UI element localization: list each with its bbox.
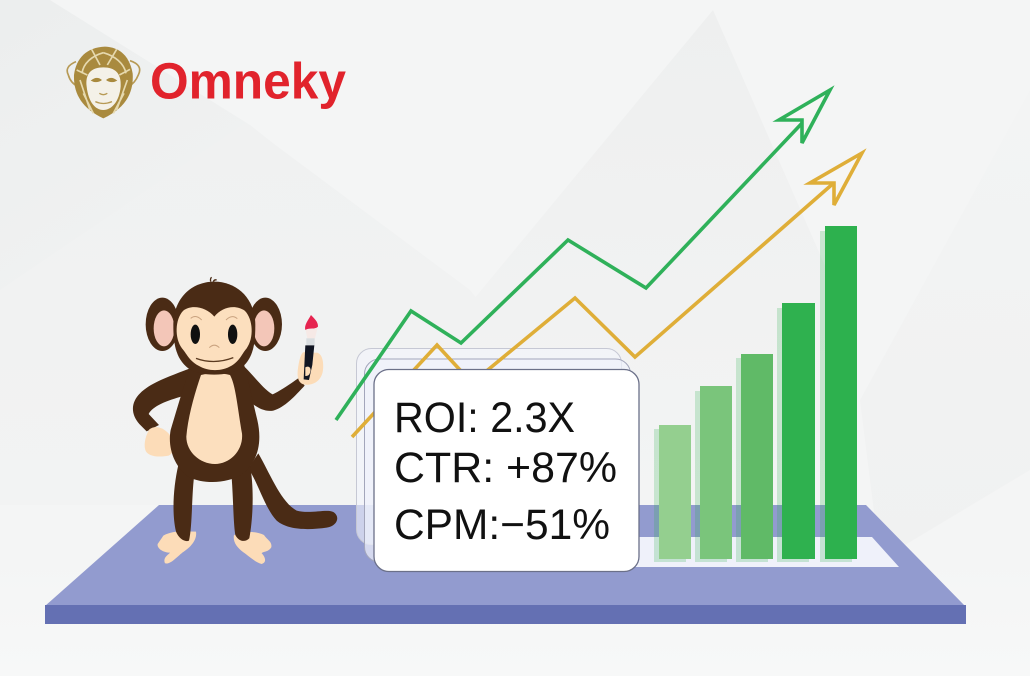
- belly: [186, 373, 242, 464]
- right foot: [234, 532, 271, 564]
- platform front side: [45, 605, 966, 624]
- brows and nose: [191, 317, 237, 348]
- smile: [196, 358, 233, 361]
- eye left: [191, 325, 200, 344]
- paintbrush: [298, 315, 323, 385]
- bar chart: [654, 226, 857, 562]
- back card 2: [364, 359, 630, 562]
- logo: wordmark: Omneky: [150, 52, 347, 110]
- bar 2: [700, 386, 732, 559]
- ear right inner: [254, 310, 274, 346]
- left foot: [158, 531, 196, 564]
- ear right: [249, 298, 282, 351]
- platform top surface: [45, 505, 965, 606]
- brush tip: [305, 315, 318, 330]
- platform light inset: [600, 537, 899, 567]
- back card 1: [356, 348, 622, 544]
- left arm: [133, 367, 193, 431]
- logo: gold monkey head: [67, 47, 140, 118]
- face: [177, 307, 252, 370]
- legs: [174, 465, 253, 541]
- metric: ROI: ROI: 2.3X: [394, 394, 575, 442]
- gold trend arrow: [352, 153, 862, 437]
- tail: [248, 453, 337, 529]
- green trend arrow: [336, 90, 830, 420]
- bar shadows: [654, 231, 852, 562]
- hair tuft: [210, 277, 217, 282]
- torso: [170, 364, 259, 482]
- bar 3: [741, 354, 773, 559]
- finger: [305, 367, 311, 376]
- metric: CPM: CPM:−51%: [394, 501, 610, 549]
- platform: [45, 505, 966, 624]
- monkey mascot: [133, 277, 337, 564]
- metric: CTR: CTR: +87%: [394, 444, 617, 492]
- bar 1: [659, 425, 691, 559]
- brush ferrule: [306, 338, 315, 346]
- eye right: [228, 325, 237, 344]
- green arrowhead: [779, 90, 830, 143]
- bar 4: [782, 303, 815, 559]
- head: [173, 282, 255, 375]
- brush handle: [304, 345, 314, 380]
- gold arrowhead: [810, 153, 862, 205]
- right hand: [298, 352, 323, 385]
- metrics card: [374, 370, 639, 572]
- ear left: [146, 298, 179, 351]
- left hand: [145, 427, 174, 457]
- ear left inner: [154, 310, 174, 346]
- bar 5: [825, 226, 857, 559]
- logo: [67, 47, 347, 118]
- right arm: [243, 365, 305, 411]
